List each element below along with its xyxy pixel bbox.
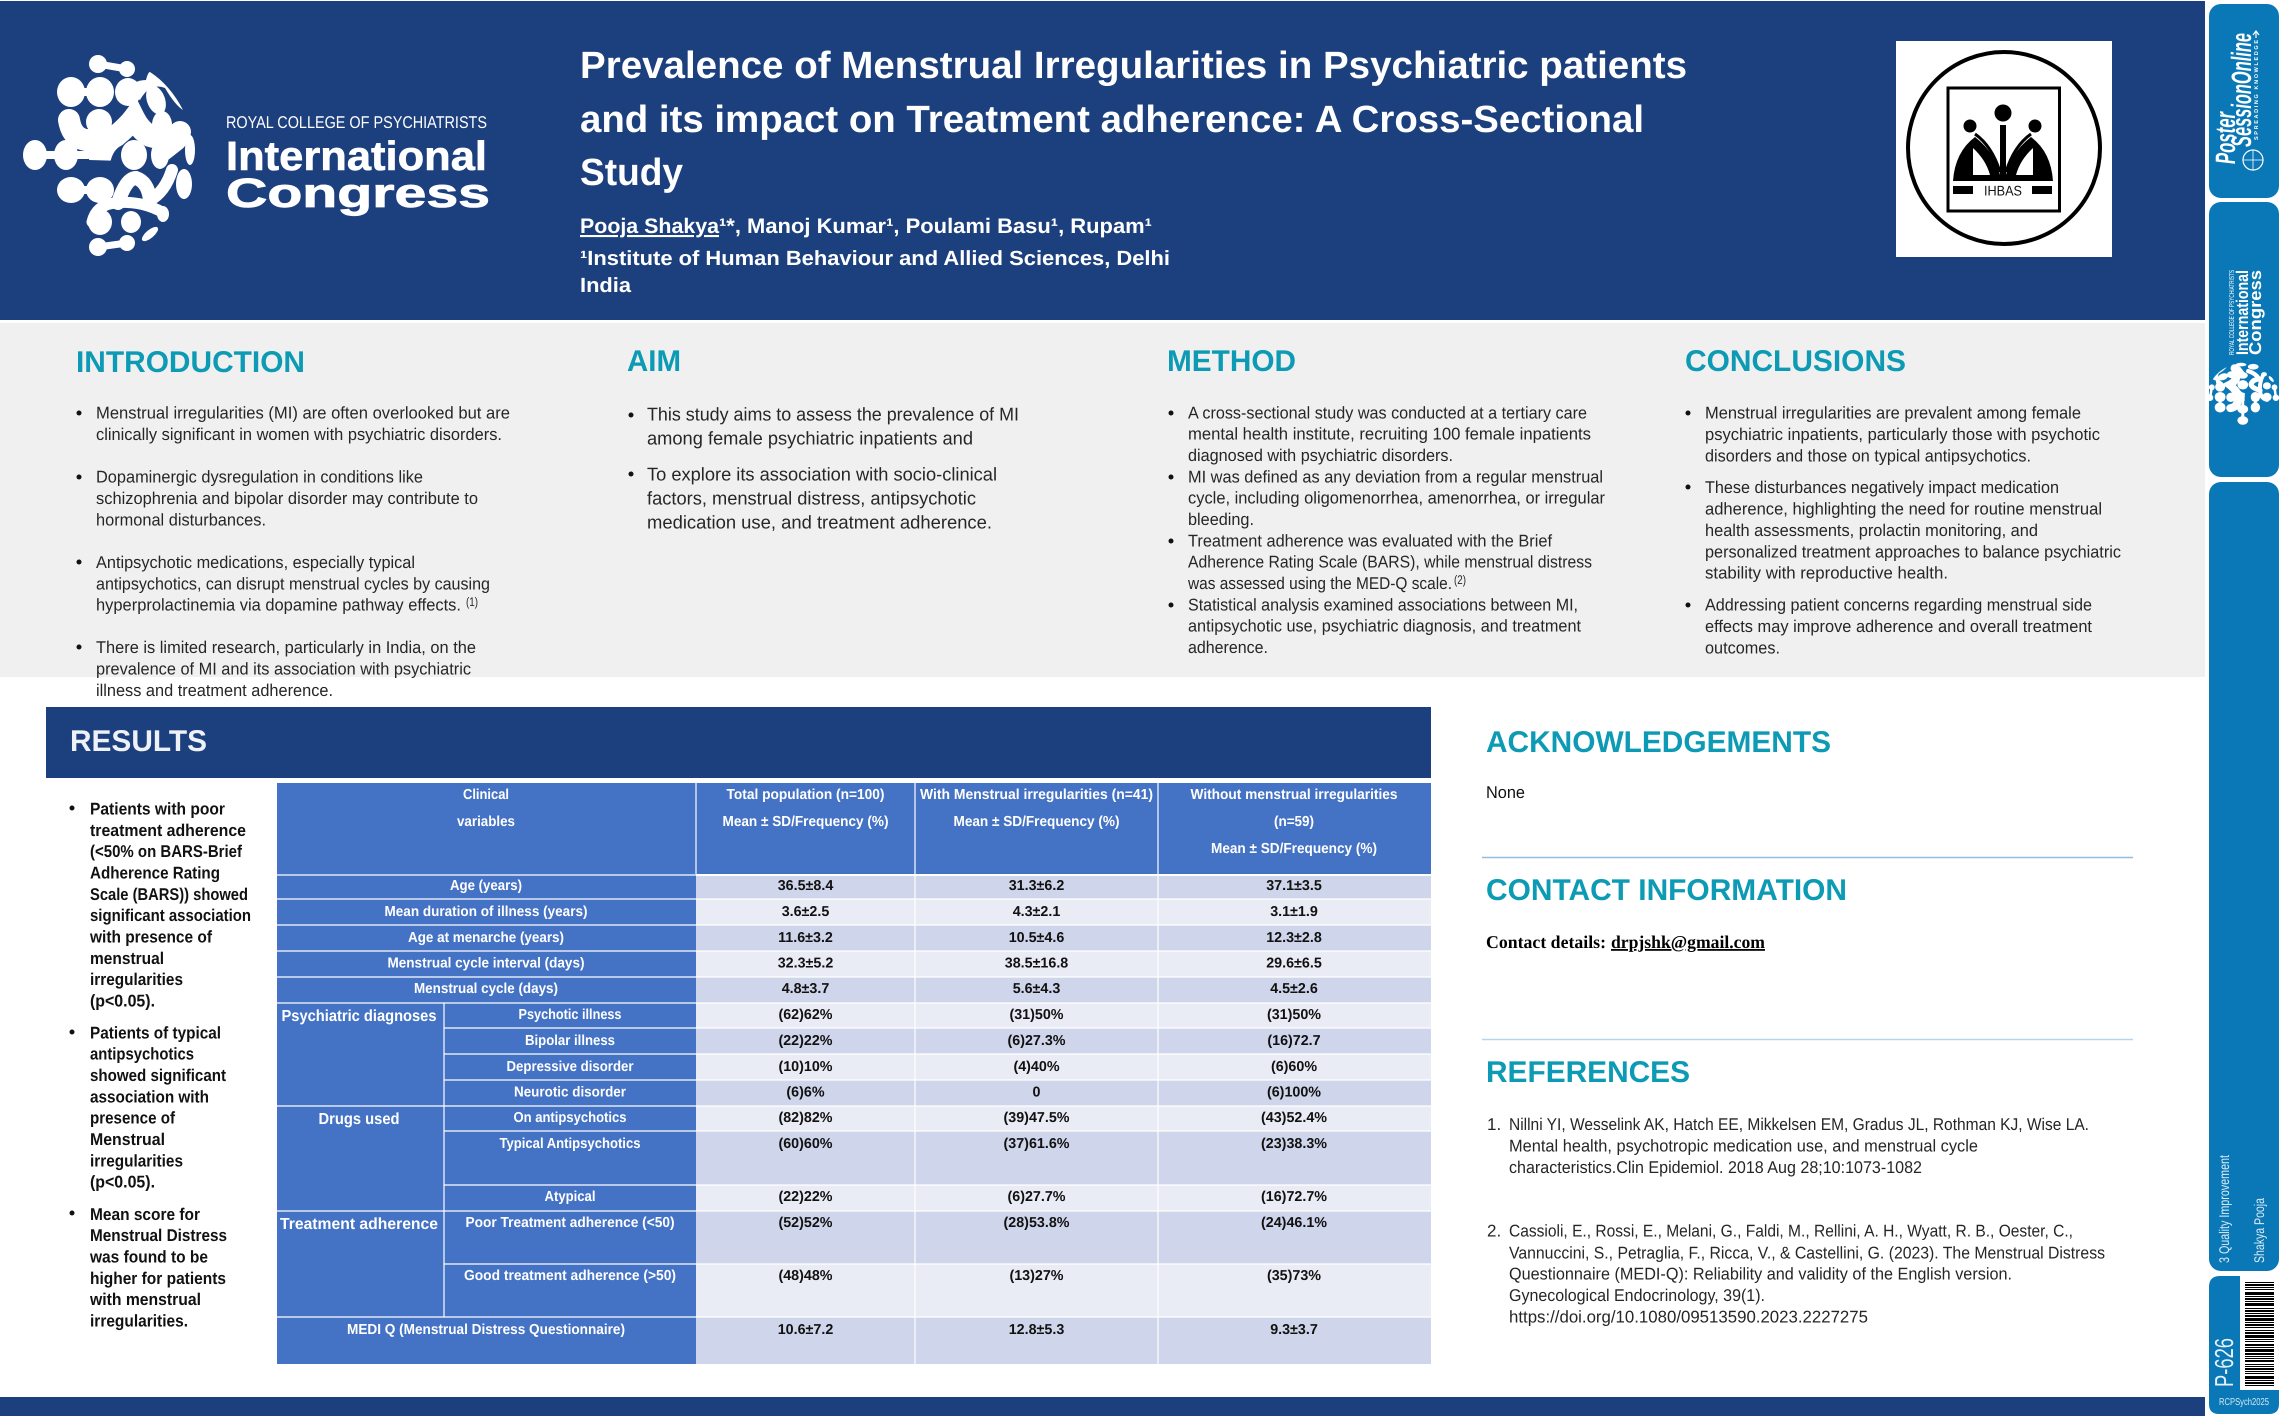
- barcode: [2245, 1282, 2274, 1387]
- results bullet list: Menstrual: [90, 1130, 165, 1149]
- table values: without menstrual irregularities: (16)72.7: [1267, 1033, 1321, 1049]
- bullet list: method: diagnosed with psychiatric disorders.: [1188, 446, 1453, 465]
- results bullet list: showed significant: [90, 1066, 226, 1085]
- table values: total population: 32.3±5.2: [778, 956, 833, 972]
- table header row: Mean ± SD/Frequency (%): [1211, 841, 1377, 857]
- authors: Pooja Shakya: [580, 215, 719, 238]
- bullet list: aim: among female psychiatric inpatients and: [647, 428, 973, 449]
- bullet list: introduction: hormonal disturbances.: [96, 510, 266, 529]
- logo wordmark: [226, 113, 490, 216]
- table values: total population: 4.8±3.7: [782, 981, 829, 997]
- reference list: Cassioli, E., Rossi, E., Melani, G., Faldi, M., Rellini, A. H., Wyatt, R. B., Oester, C.,: [1509, 1222, 2073, 1241]
- bullet list: introduction: prevalence of MI and its association with psychiatric: [96, 660, 471, 679]
- bullet list: conclusions: stability with reproductive health.: [1705, 564, 1948, 583]
- bullet list: conclusions: outcomes.: [1705, 638, 1780, 657]
- side tab: poster number and barcode: P-626: [2209, 1338, 2239, 1387]
- reference list: characteristics.Clin Epidemiol. 2018 Aug 28;10:1073-1082: [1509, 1158, 1922, 1177]
- table values: total population: (48)48%: [778, 1268, 833, 1284]
- bullet list: aim: factors, menstrual distress, antipsychotic: [647, 488, 976, 509]
- results bullet list: presence of: [90, 1109, 175, 1128]
- results bullet list: Patients of typical: [90, 1023, 221, 1042]
- table values: with menstrual irregularities: 12.8±5.3: [1009, 1322, 1064, 1338]
- bullet list: method: mental health institute, recruiting 100 female inpatients: [1188, 425, 1591, 444]
- table values: without menstrual irregularities: 12.3±2.8: [1266, 930, 1322, 946]
- bullet list: aim: [628, 404, 1019, 533]
- results bullet list: irregularities: [90, 970, 183, 989]
- table values: with menstrual irregularities: 38.5±16.8: [1005, 956, 1068, 972]
- panel: contact information: CONTACT INFORMATION: [1486, 874, 1847, 907]
- results bullet list: with menstrual: [89, 1290, 201, 1309]
- table row labels: Bipolar illness: [525, 1033, 615, 1049]
- results bullet list: Menstrual Distress: [90, 1226, 227, 1245]
- table values: total population: (6)6%: [786, 1084, 825, 1100]
- table values: total population: (10)10%: [778, 1059, 833, 1075]
- bullet list: introduction: Menstrual irregularities (MI) are often overlooked but are: [96, 403, 510, 422]
- bullet list: conclusions: adherence, highlighting the need for routine menstrual: [1705, 500, 2102, 519]
- table group labels: Psychiatric diagnoses: [282, 1008, 437, 1025]
- bullet list: method: was assessed using the MED-Q scale.: [1187, 574, 1452, 593]
- side tab: category and presenter: Shakya Pooja: [2251, 1198, 2267, 1263]
- poster title: [580, 45, 1687, 194]
- side tab: poster session online: SPREADING KNOWLEDGE: [2254, 40, 2260, 140]
- table group labels: Drugs used: [318, 1111, 400, 1128]
- panel: acknowledgements: [1486, 726, 1831, 802]
- table values: with menstrual irregularities: (6)27.3%: [1007, 1033, 1066, 1049]
- results bullet list: Patients with poor: [90, 800, 225, 818]
- bullet list: conclusions: These disturbances negatively impact medication: [1705, 478, 2059, 497]
- heading: aim: AIM: [627, 345, 681, 378]
- table values: without menstrual irregularities: (31)50%: [1267, 1007, 1321, 1023]
- results bullet list: (p<0.05).: [90, 1173, 155, 1192]
- table row labels: Menstrual cycle (days): [414, 981, 558, 997]
- bullet list: method: A cross-sectional study was conducted at a tertiary care: [1188, 403, 1587, 422]
- table row labels: Good treatment adherence (>50): [464, 1268, 676, 1284]
- results bullet list: (<50% on BARS-Brief: [90, 842, 242, 861]
- table row labels: Neurotic disorder: [514, 1084, 626, 1100]
- bullet list: introduction: schizophrenia and bipolar disorder may contribute to: [96, 489, 478, 508]
- panel: contact information: drpjshk@gmail.com: [1611, 932, 1765, 952]
- table values: without menstrual irregularities: 29.6±6.5: [1266, 956, 1322, 972]
- reference list: Gynecological Endocrinology, 39(1).: [1509, 1286, 1765, 1305]
- table values: with menstrual irregularities: (31)50%: [1009, 1007, 1064, 1023]
- table values: total population: (62)62%: [778, 1007, 833, 1023]
- table group labels: [280, 1008, 438, 1233]
- table values: total population: 36.5±8.4: [778, 878, 833, 894]
- bullet list: conclusions: [1686, 403, 2121, 657]
- table row labels: Mean duration of illness (years): [384, 904, 588, 920]
- table values: total population: 11.6±3.2: [778, 930, 833, 946]
- panel: contact information: Contact details:: [1486, 932, 1606, 952]
- table header row: variables: [457, 814, 515, 830]
- reference list: 1.: [1487, 1115, 1501, 1134]
- results bullet list: association with: [90, 1087, 209, 1106]
- logo: IHBAS: [1896, 41, 2112, 257]
- bullet list: aim: This study aims to assess the prevalence of MI: [647, 404, 1019, 425]
- table values: total population: (22)22%: [778, 1189, 833, 1205]
- table header row: With Menstrual irregularities (n=41): [920, 787, 1153, 803]
- table row labels: Typical Antipsychotics: [500, 1136, 640, 1152]
- table values: without menstrual irregularities: 37.1±3.5: [1266, 878, 1322, 894]
- top grey section background: [0, 323, 2205, 677]
- bullet list: method: Statistical analysis examined associations between MI,: [1188, 595, 1578, 614]
- panel: acknowledgements: ACKNOWLEDGEMENTS: [1486, 726, 1831, 759]
- bullet list: introduction: antipsychotics, can disrupt menstrual cycles by causing: [96, 574, 490, 593]
- panel: method: [1167, 345, 1605, 657]
- heading: conclusions: CONCLUSIONS: [1685, 345, 1906, 378]
- logo wordmark: International: [226, 133, 487, 179]
- authors: ¹*, Manoj Kumar¹, Poulami Basu¹, Rupam¹: [719, 215, 1152, 238]
- panel: contact information: [1486, 874, 1847, 952]
- table header row: Mean ± SD/Frequency (%): [954, 814, 1120, 830]
- table header row: Clinical: [463, 787, 509, 803]
- side tab: poster session online: Poster: [2210, 111, 2241, 164]
- table values: without menstrual irregularities: (6)60%: [1271, 1059, 1317, 1075]
- poster title: and its impact on Treatment adherence: A Cross-Sectional: [580, 99, 1644, 141]
- bullet list: method: Treatment adherence was evaluated with the Brief: [1188, 531, 1552, 550]
- table values: without menstrual irregularities: (43)52.4%: [1261, 1110, 1327, 1126]
- table values: without menstrual irregularities: (35)73%: [1267, 1268, 1321, 1284]
- side tab: poster number and barcode: RCPSych2025: [2219, 1397, 2269, 1408]
- bullet list: introduction: Dopaminergic dysregulation in conditions like: [96, 468, 423, 487]
- bullet list: method: bleeding.: [1188, 510, 1254, 529]
- table row labels: [347, 878, 676, 1338]
- table values: total population: 10.6±7.2: [778, 1322, 833, 1338]
- heading: introduction: INTRODUCTION: [76, 346, 305, 379]
- table values: total population: (22)22%: [778, 1033, 833, 1049]
- bullet list: conclusions: Addressing patient concerns regarding menstrual side: [1705, 596, 2092, 615]
- table values: without menstrual irregularities: (16)72.7%: [1261, 1189, 1327, 1205]
- results bullet list: higher for patients: [90, 1269, 226, 1288]
- table header row: [457, 787, 1398, 857]
- heading: references: REFERENCES: [1486, 1056, 1690, 1089]
- results bullet list: with presence of: [89, 928, 212, 946]
- bullet list: method: adherence.: [1188, 638, 1268, 657]
- bullet list: conclusions: psychiatric inpatients, particularly those with psychotic: [1705, 425, 2100, 444]
- table fills: [277, 783, 1431, 1364]
- affiliation: [580, 247, 1170, 297]
- table row labels: Age at menarche (years): [408, 930, 564, 946]
- table header row: (n=59): [1274, 814, 1314, 830]
- affiliation: ¹Institute of Human Behaviour and Allied Sciences, Delhi: [580, 247, 1170, 270]
- results bullet list: irregularities.: [90, 1312, 188, 1330]
- table row labels: Atypical: [544, 1189, 596, 1205]
- table row labels: On antipsychotics: [514, 1110, 626, 1126]
- table values: with menstrual irregularities: 10.5±4.6: [1009, 930, 1064, 946]
- results bullet list: irregularities: [90, 1151, 183, 1170]
- bullet list: introduction: clinically significant in women with psychiatric disorders.: [96, 425, 502, 444]
- table row labels: Depressive disorder: [506, 1059, 634, 1075]
- table header row: Total population (n=100): [726, 787, 885, 803]
- bullet list: method: (2): [1454, 573, 1466, 587]
- results bullet list: significant association: [90, 906, 251, 925]
- table values: without menstrual irregularities: (6)100%: [1267, 1084, 1321, 1100]
- table values: without menstrual irregularities: 3.1±1.9: [1270, 904, 1318, 920]
- panel: references: [1486, 1056, 2105, 1326]
- table values: without menstrual irregularities: (24)46.1%: [1261, 1215, 1327, 1231]
- bullet list: introduction: Antipsychotic medications, especially typical: [96, 553, 415, 572]
- reference list: Mental health, psychotropic medication use, and menstrual cycle: [1509, 1137, 1978, 1156]
- logo wordmark: Congress: [226, 170, 490, 216]
- table group labels: Treatment adherence: [280, 1216, 438, 1233]
- logo: IHBAS: IHBAS: [1984, 182, 2022, 198]
- results bullet list: treatment adherence: [90, 821, 246, 840]
- bullet list: conclusions: disorders and those on typical antipsychotics.: [1705, 446, 2031, 465]
- table row labels: MEDI Q (Menstrual Distress Questionnaire): [347, 1322, 625, 1338]
- table values: with menstrual irregularities: (4)40%: [1013, 1059, 1060, 1075]
- bullet list: method: [1168, 403, 1605, 657]
- side tab: international congress: ROYAL COLLEGE OF PSYCHIATRISTS: [2229, 270, 2236, 355]
- reference list: 2.: [1487, 1222, 1501, 1241]
- table values: without menstrual irregularities: [1261, 878, 1327, 1338]
- bullet list: conclusions: Menstrual irregularities are prevalent among female: [1705, 403, 2081, 422]
- table values: with menstrual irregularities: [1004, 878, 1070, 1338]
- panel: introduction: [76, 346, 510, 700]
- panel: aim: [627, 345, 1019, 533]
- table row labels: Age (years): [450, 878, 522, 894]
- table values: with menstrual irregularities: (28)53.8%: [1004, 1215, 1070, 1231]
- table values: with menstrual irregularities: (6)27.7%: [1007, 1189, 1066, 1205]
- reference list: Questionnaire (MEDI-Q): Reliability and validity of the English version.: [1509, 1265, 2012, 1284]
- results bullet list: Scale (BARS)) showed: [90, 885, 248, 904]
- side tab: category and presenter: 3 Quality Improvement: [2216, 1155, 2232, 1263]
- reference list: [1487, 1115, 2105, 1326]
- table values: with menstrual irregularities: (39)47.5%: [1004, 1110, 1070, 1126]
- bullet list: introduction: hyperprolactinemia via dopamine pathway effects.: [96, 596, 461, 615]
- table values: without menstrual irregularities: 9.3±3.7: [1270, 1322, 1318, 1338]
- results bullet list: Mean score for: [90, 1205, 200, 1224]
- table header row: Mean ± SD/Frequency (%): [722, 814, 889, 830]
- bullet list: method: cycle, including oligomenorrhea, amenorrhea, or irregular: [1188, 489, 1605, 508]
- table row labels: Menstrual cycle interval (days): [388, 956, 585, 972]
- bullet list: introduction: illness and treatment adherence.: [96, 681, 333, 700]
- results bullet list: antipsychotics: [90, 1045, 194, 1064]
- table values: without menstrual irregularities: 4.5±2.6: [1270, 981, 1318, 997]
- table values: with menstrual irregularities: (13)27%: [1009, 1268, 1064, 1284]
- table values: without menstrual irregularities: (23)38.3%: [1261, 1136, 1327, 1152]
- table values: total population: (52)52%: [778, 1215, 833, 1231]
- results bullet list: menstrual: [90, 949, 164, 968]
- results bullet list: [70, 800, 251, 1330]
- table values: with menstrual irregularities: 5.6±4.3: [1013, 981, 1060, 997]
- results bullet list: Adherence Rating: [90, 864, 220, 882]
- results table: [277, 783, 1431, 1364]
- footer band: [0, 1397, 2205, 1416]
- bullet list: method: MI was defined as any deviation from a regular menstrual: [1188, 467, 1603, 486]
- bullet list: conclusions: personalized treatment approaches to balance psychiatric: [1705, 542, 2121, 561]
- bullet list: aim: To explore its association with socio-clinical: [647, 464, 997, 485]
- side tab: category and presenter: [2209, 482, 2279, 1271]
- side tab: international congress: International: [2233, 270, 2252, 355]
- table values: with menstrual irregularities: 31.3±6.2: [1009, 878, 1064, 894]
- header band: [0, 1, 2205, 320]
- bullet list: conclusions: health assessments, prolactin monitoring, and: [1705, 521, 2038, 540]
- side tab: poster session online: [2209, 4, 2279, 198]
- bullet list: conclusions: effects may improve adherence and overall treatment: [1705, 617, 2092, 636]
- logo wordmark: ROYAL COLLEGE OF PSYCHIATRISTS: [226, 113, 487, 132]
- table values: total population: 3.6±2.5: [782, 904, 829, 920]
- table values: total population: [778, 878, 833, 1338]
- heading: method: METHOD: [1167, 345, 1296, 378]
- reference list: Nillni YI, Wesselink AK, Hatch EE, Mikkelsen EM, Gradus JL, Rothman KJ, Wise LA.: [1509, 1115, 2089, 1134]
- table values: total population: (60)60%: [778, 1136, 833, 1152]
- side tab: international congress: [2207, 202, 2279, 477]
- bullet list: introduction: There is limited research, particularly in India, on the: [96, 638, 476, 657]
- bullet list: aim: medication use, and treatment adherence.: [647, 512, 992, 533]
- table header row: Without menstrual irregularities: [1190, 787, 1398, 803]
- results bullet list: was found to be: [89, 1248, 208, 1266]
- bullet list: method: antipsychotic use, psychiatric diagnosis, and treatment: [1188, 617, 1581, 636]
- side tab: poster number and barcode: [2209, 1276, 2283, 1414]
- icon: globe of linked blobs: [23, 55, 195, 256]
- table row labels: Psychotic illness: [518, 1007, 622, 1023]
- reference list: https://doi.org/10.1080/09513590.2023.2227275: [1509, 1307, 1868, 1326]
- results heading band: [46, 707, 1431, 778]
- results bullet list: (p<0.05).: [90, 992, 155, 1010]
- table values: with menstrual irregularities: (37)61.6%: [1004, 1136, 1070, 1152]
- panel: conclusions: [1685, 345, 2121, 657]
- bullet list: method: Adherence Rating Scale (BARS), while menstrual distress: [1188, 553, 1592, 572]
- table values: with menstrual irregularities: 0: [1033, 1084, 1041, 1100]
- poster title: Study: [580, 152, 683, 194]
- bullet list: introduction: (1): [466, 595, 478, 609]
- table row labels: Poor Treatment adherence (<50): [466, 1215, 675, 1231]
- logo: Royal College of Psychiatrists International Congress: [23, 55, 490, 256]
- side tab: international congress: Congress: [2246, 270, 2265, 355]
- affiliation: India: [580, 274, 632, 297]
- bullet list: introduction: [76, 403, 510, 700]
- results heading band: RESULTS: [70, 725, 207, 758]
- table values: with menstrual irregularities: 4.3±2.1: [1013, 904, 1060, 920]
- table values: total population: (82)82%: [778, 1110, 833, 1126]
- poster title: Prevalence of Menstrual Irregularities in Psychiatric patients: [580, 45, 1687, 87]
- panel: acknowledgements: None: [1486, 783, 1525, 802]
- reference list: Vannuccini, S., Petraglia, F., Ricca, V., & Castellini, G. (2023). The Menstrual Distress: [1509, 1243, 2105, 1262]
